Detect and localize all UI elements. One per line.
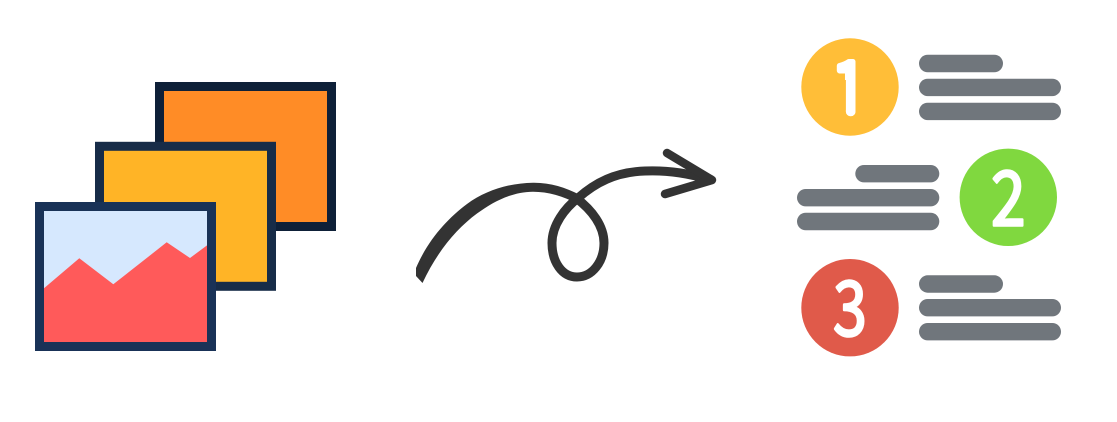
text lines	[797, 165, 939, 230]
green number badge: 2	[991, 138, 1026, 248]
curly arrow	[416, 153, 712, 283]
middle yellow frame	[100, 146, 272, 286]
red number badge: 3	[833, 247, 867, 358]
red mountains	[44, 242, 208, 342]
frame border	[40, 206, 212, 346]
sky	[40, 207, 211, 347]
yellow number badge: 1	[832, 29, 866, 139]
list item 2	[797, 138, 1057, 248]
infographic canvas	[35, 38, 1061, 356]
arrow tail, tapered	[416, 183, 580, 283]
text lines	[919, 275, 1061, 340]
list item 3	[801, 247, 1061, 358]
image stack icon	[40, 86, 332, 347]
front picture frame	[40, 206, 212, 347]
arrow loop and shaft	[552, 171, 712, 277]
arrow head	[665, 153, 712, 194]
back orange frame	[160, 86, 332, 226]
text lines	[919, 55, 1061, 120]
yellow number badge	[801, 38, 899, 136]
green number badge	[960, 138, 1057, 248]
list item 1	[801, 38, 1061, 136]
red number badge	[801, 247, 899, 358]
